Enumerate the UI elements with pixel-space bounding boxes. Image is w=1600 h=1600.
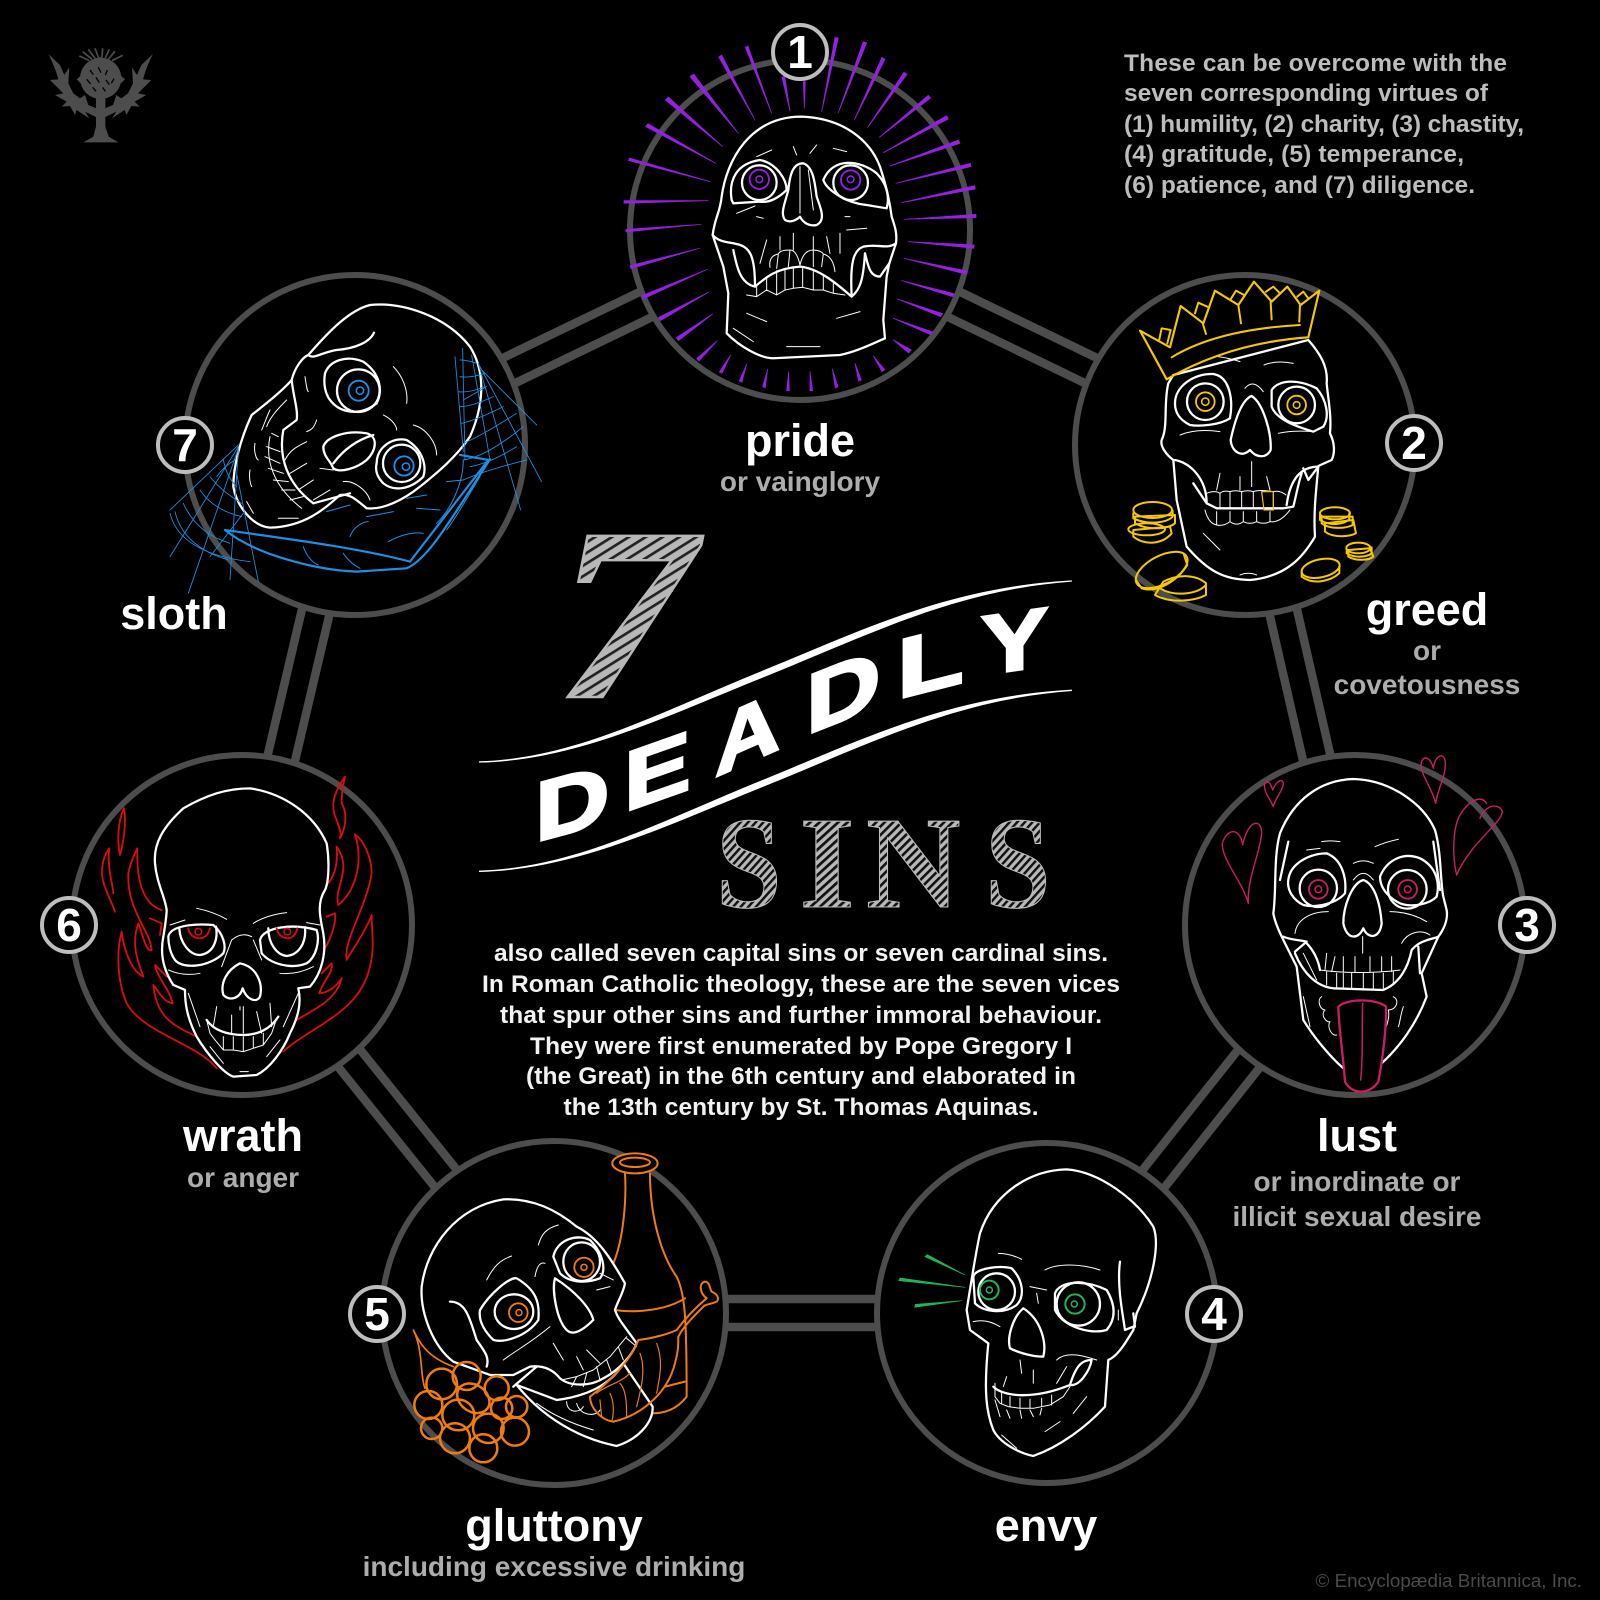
number badge 3: 3 xyxy=(1514,899,1540,951)
panel: pride xyxy=(624,37,976,400)
skull: sloth xyxy=(170,305,542,593)
virtues note: (1) humility, (2) charity, (3) chastity, xyxy=(1124,111,1524,138)
label: greed: covetousness xyxy=(1334,669,1520,700)
word: Deadly: Y xyxy=(981,590,1048,693)
panel: lust xyxy=(1185,755,1525,1095)
number badge 7 xyxy=(158,418,212,472)
envy rays xyxy=(899,1255,965,1307)
copyright: © Encyclopædia Britannica, Inc. xyxy=(1316,1570,1582,1591)
word: Deadly: A xyxy=(715,673,780,795)
panel: sloth xyxy=(170,275,542,615)
word: Sins xyxy=(716,790,1051,936)
description text: that spur other sins and further immoral behaviour. xyxy=(500,1002,1102,1029)
panel: greed xyxy=(1075,275,1415,615)
virtues note: These can be overcome with the xyxy=(1124,50,1507,77)
virtues note: seven corresponding virtues of xyxy=(1124,80,1489,107)
virtues note: (6) patience, and (7) diligence. xyxy=(1124,172,1475,199)
number badge 2 xyxy=(1387,416,1441,470)
connector double lines xyxy=(228,217,1369,1327)
description text: In Roman Catholic theology, these are the seven vices xyxy=(482,971,1120,998)
virtues note xyxy=(1124,50,1524,199)
label: sloth: sloth xyxy=(120,588,228,639)
panel: gluttony xyxy=(382,1141,726,1485)
label: greed: or xyxy=(1413,635,1441,666)
word: Deadly: L xyxy=(897,607,964,718)
label: gluttony xyxy=(363,1500,745,1582)
label: envy: envy xyxy=(995,1500,1097,1551)
number badge 5: 5 xyxy=(364,1288,390,1340)
number badge 6: 6 xyxy=(56,899,82,951)
number badge 6 xyxy=(42,898,96,952)
number badge 7: 7 xyxy=(172,419,198,471)
word: Sins: S xyxy=(716,790,782,935)
panel: wrath xyxy=(72,755,412,1095)
label: greed: greed xyxy=(1366,584,1488,635)
number badge 5 xyxy=(350,1287,404,1341)
big seven: 7 xyxy=(556,478,707,751)
skull: greed xyxy=(1128,282,1373,601)
cobwebs xyxy=(170,348,542,593)
purple rays xyxy=(624,37,976,391)
skull: wrath xyxy=(102,777,373,1077)
description text xyxy=(482,940,1120,1121)
label: wrath: wrath xyxy=(182,1110,303,1161)
label: wrath xyxy=(182,1110,303,1193)
number badge 1: 1 xyxy=(787,26,813,78)
number badge 2: 2 xyxy=(1401,417,1427,469)
panel: envy xyxy=(877,1143,1217,1483)
number badge 1 xyxy=(773,25,827,79)
description text: (the Great) in the 6th century and elaborated in xyxy=(526,1063,1076,1090)
thistle logo xyxy=(48,48,153,142)
bottle xyxy=(612,1153,687,1413)
number badge 4: 4 xyxy=(1201,1288,1227,1340)
title: 7 Deadly Sins xyxy=(479,478,1072,936)
description text: They were first enumerated by Pope Gregory I xyxy=(530,1033,1072,1060)
label: lust: lust xyxy=(1317,1110,1397,1161)
hearts xyxy=(1222,756,1502,903)
word: Sins: S xyxy=(985,790,1051,935)
label: pride xyxy=(720,415,881,497)
description text: also called seven capital sins or seven cardinal sins. xyxy=(494,940,1108,967)
virtues note: (4) gratitude, (5) temperance, xyxy=(1124,141,1464,168)
label: wrath: or anger xyxy=(187,1162,299,1193)
banner curves xyxy=(479,580,1072,872)
coins xyxy=(1128,502,1373,601)
drumstick xyxy=(590,1282,718,1422)
skull: pride xyxy=(624,37,976,391)
word: Deadly: D xyxy=(535,747,610,860)
word: Deadly: D xyxy=(806,629,881,753)
label: gluttony: including excessive drinking xyxy=(363,1551,745,1582)
label: lust xyxy=(1232,1110,1482,1232)
word: Sins: N xyxy=(866,791,961,936)
skull: envy xyxy=(899,1169,1156,1456)
label: lust: or inordinate or xyxy=(1254,1166,1461,1197)
number badge 3 xyxy=(1500,898,1554,952)
label: pride: pride xyxy=(745,415,855,466)
pillow xyxy=(303,460,480,568)
label: greed xyxy=(1334,584,1520,700)
skull: gluttony xyxy=(413,1153,718,1462)
label: lust: illicit sexual desire xyxy=(1232,1201,1482,1232)
label: pride: or vainglory xyxy=(720,466,881,497)
skull: lust xyxy=(1222,756,1502,1092)
pillow outline xyxy=(225,455,490,572)
grapes xyxy=(413,1330,529,1462)
label: gluttony: gluttony xyxy=(465,1500,643,1551)
description text: the 13th century by St. Thomas Aquinas. xyxy=(564,1094,1038,1121)
flames xyxy=(102,777,373,1068)
word: Deadly: E xyxy=(624,713,691,830)
word: Deadly xyxy=(535,590,1048,860)
word: Sins: I xyxy=(799,790,855,936)
number badge 4 xyxy=(1187,1287,1241,1341)
